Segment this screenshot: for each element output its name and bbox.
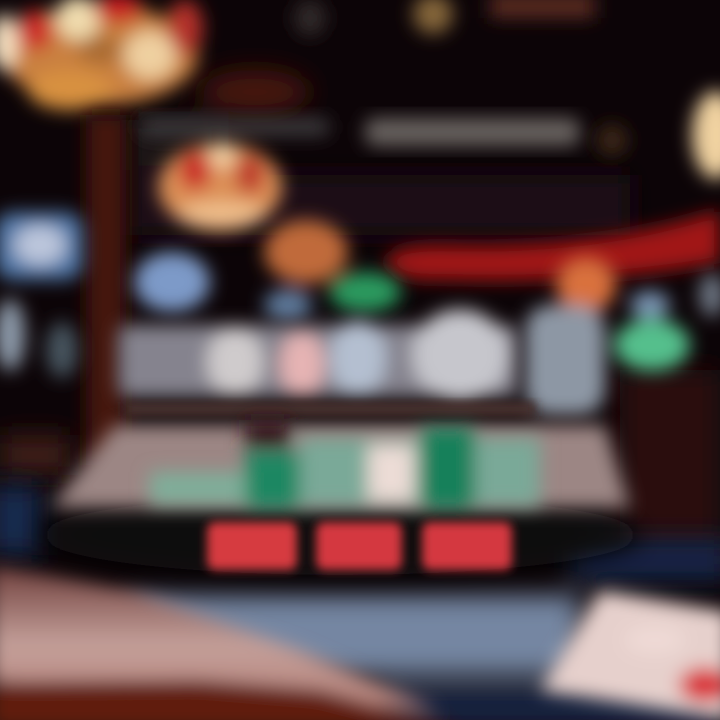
- row of playing cards: [118, 309, 518, 401]
- right figures: [525, 257, 720, 415]
- felt: [150, 420, 540, 508]
- background: dark room glow: [0, 70, 720, 550]
- table edge: [125, 402, 535, 416]
- top lights: [294, 0, 720, 179]
- bottom bands: [0, 485, 720, 720]
- left screens: [0, 212, 210, 378]
- orange figure and green top: [264, 220, 401, 321]
- second lamp: [158, 141, 282, 231]
- red buttons: [207, 522, 512, 570]
- table rail: [40, 495, 640, 575]
- blurred heading band: [140, 118, 580, 146]
- paper card bottom right: [540, 590, 720, 720]
- bottom-left carpet: [0, 565, 460, 720]
- chandelier top left: [0, 0, 203, 110]
- poker table: [40, 402, 640, 575]
- wooden pole: [86, 115, 126, 465]
- table surface: [50, 425, 630, 508]
- red banner: [385, 210, 720, 281]
